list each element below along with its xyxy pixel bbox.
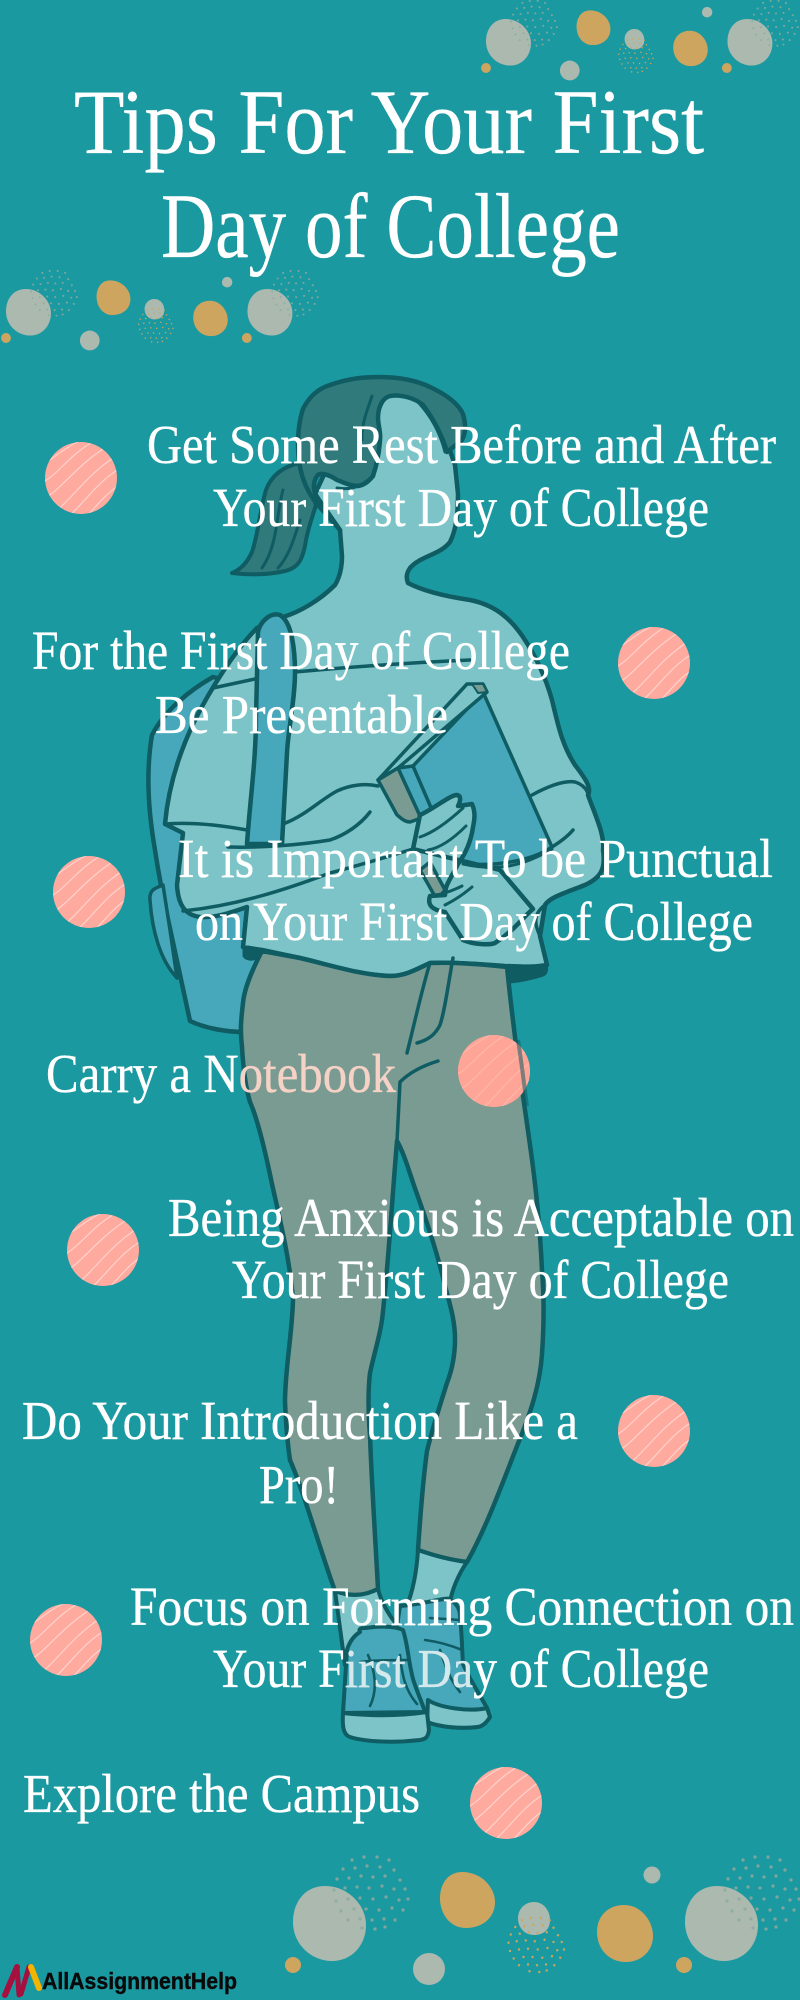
tip 8 text: Explore the Campus <box>23 1763 420 1824</box>
left shoe <box>343 1627 425 1713</box>
tip 5 <box>65 1187 794 1310</box>
logo wordmark: AllAssignmentHelp <box>42 1968 237 1994</box>
backpack strap <box>247 614 295 844</box>
tip 1 text <box>147 414 776 538</box>
logo mark <box>5 1967 39 1995</box>
book cover <box>413 692 552 864</box>
body and shirt <box>165 394 604 976</box>
shoe laces <box>360 1618 462 1706</box>
tip 5 marker <box>65 1210 143 1290</box>
tip 4 <box>46 1031 534 1111</box>
tip 2 text: Be Presentable <box>155 684 448 745</box>
tip 7 text: Your First Day of College <box>213 1638 709 1699</box>
tip 6 text: Do Your Introduction Like a <box>22 1390 578 1451</box>
title: Tips For Your First <box>74 71 704 173</box>
tip 4 marker <box>456 1031 534 1111</box>
tip 4 text: Carry a Notebook <box>46 1043 396 1104</box>
right sock <box>385 1550 467 1640</box>
tip 8 <box>23 1763 546 1843</box>
tip 2 marker <box>616 623 694 703</box>
tip 5 text <box>168 1187 794 1310</box>
hair strands <box>262 396 445 568</box>
decoration: top right dots <box>481 0 799 80</box>
tip 1 text: Your First Day of College <box>213 477 709 538</box>
tip 2 text <box>32 620 570 745</box>
book spine <box>378 768 430 822</box>
left sock <box>335 1589 400 1665</box>
title <box>74 71 704 277</box>
leggings <box>241 951 543 1595</box>
book pages <box>378 684 487 780</box>
hair <box>298 377 465 530</box>
tip 1 marker <box>43 438 121 518</box>
tip 7 text <box>130 1576 794 1699</box>
right shoe <box>395 1599 490 1728</box>
hands <box>413 795 533 944</box>
tip 3 <box>51 828 773 952</box>
tip 3 text <box>178 828 773 952</box>
student illustration <box>148 377 604 1742</box>
tip 6 marker <box>616 1391 694 1471</box>
decoration: left dots <box>1 270 319 350</box>
logo <box>5 1967 237 1995</box>
book <box>378 684 552 900</box>
title: Day of College <box>161 175 620 277</box>
tip 2 text: For the First Day of College <box>32 620 570 681</box>
backpack <box>148 677 300 1032</box>
tip 7 marker <box>28 1600 106 1680</box>
tip 5 text: Your First Day of College <box>232 1249 729 1310</box>
shirt seams <box>165 660 588 936</box>
tip 2 <box>32 620 694 745</box>
backpack pocket <box>150 885 177 978</box>
ponytail <box>232 463 316 574</box>
tip 6 text: Pro! <box>259 1454 339 1515</box>
decoration: bottom dots <box>285 1855 800 1985</box>
tip 3 marker <box>51 852 129 932</box>
shirt hem shadow <box>243 947 548 983</box>
tip 1 <box>43 414 776 538</box>
tip 6 text <box>22 1390 578 1515</box>
leggings pocket lines <box>397 958 453 1141</box>
tip 7 <box>28 1576 794 1699</box>
tip 6 <box>22 1390 694 1515</box>
tip 8 marker <box>468 1763 546 1843</box>
